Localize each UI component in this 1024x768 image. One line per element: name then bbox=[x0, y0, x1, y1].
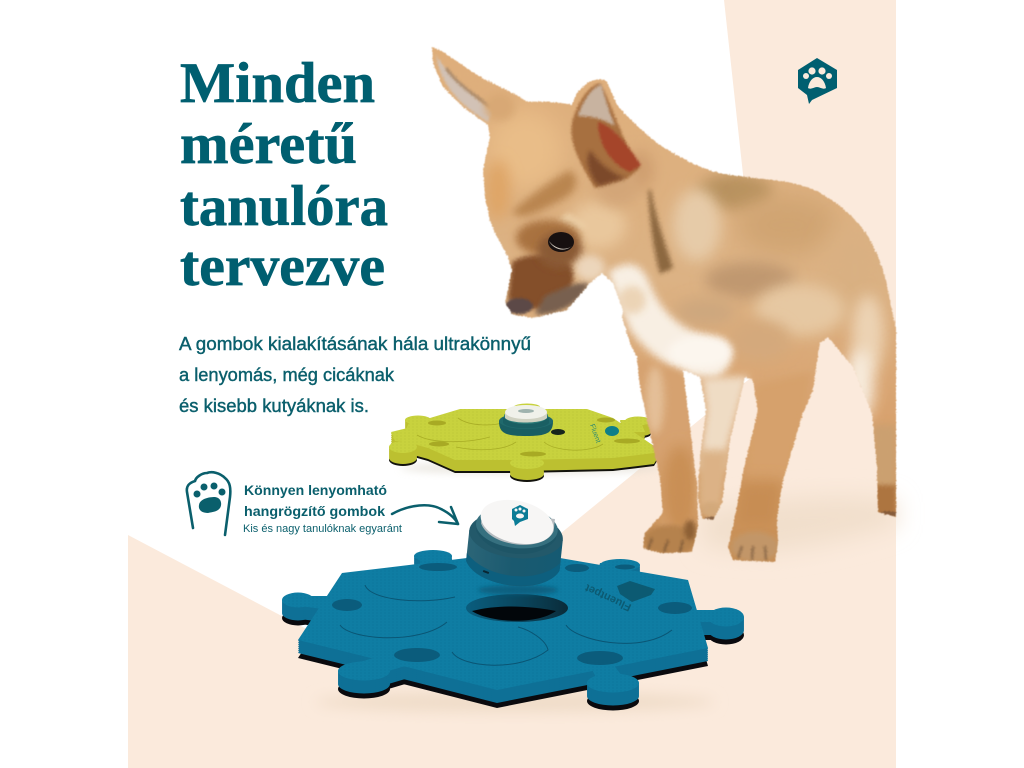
floor shadow under dog bbox=[700, 497, 896, 552]
muzzle bbox=[508, 255, 574, 309]
yellow board logo bbox=[588, 423, 619, 444]
title bbox=[180, 52, 388, 298]
dog fur shading bbox=[436, 55, 898, 562]
yellow board shadow bbox=[400, 462, 660, 474]
yellow board carved circles bbox=[417, 418, 603, 450]
body text: A gombok kialakításának hála ultrakönnyű bbox=[179, 334, 531, 354]
head tone bbox=[493, 115, 558, 184]
title: tervezve bbox=[180, 235, 385, 298]
small dark button bbox=[499, 405, 553, 436]
button port bbox=[483, 570, 489, 574]
back tones bbox=[697, 174, 773, 210]
button shadow bbox=[478, 585, 558, 595]
neck crease bbox=[648, 190, 673, 274]
body text: a lenyomás, még cicáknak bbox=[179, 365, 395, 385]
legs tone bbox=[638, 362, 698, 528]
yellow board side bbox=[389, 404, 657, 480]
callout text: hangrögzítő gombok bbox=[244, 504, 386, 519]
title: tanulóra bbox=[180, 175, 388, 238]
callout text: Könnyen lenyomható bbox=[244, 483, 387, 498]
right ear bbox=[571, 83, 640, 188]
board logo: Fluentpet bbox=[583, 581, 633, 613]
board carved circles bbox=[340, 585, 672, 665]
eye patch bbox=[516, 220, 580, 256]
button white top bbox=[476, 493, 558, 551]
background: white panel bbox=[128, 0, 764, 673]
brow band bbox=[512, 170, 576, 216]
dog body silhouette bbox=[432, 47, 896, 562]
yellow board hole bbox=[551, 429, 565, 435]
background: beige panel bbox=[128, 0, 896, 768]
paws bbox=[643, 525, 697, 555]
board top face bbox=[282, 550, 744, 692]
dog eye bbox=[548, 232, 574, 252]
callout text: Kis és nagy tanulóknak egyaránt bbox=[243, 523, 402, 535]
yellow board notches bbox=[428, 418, 640, 456]
body text bbox=[179, 334, 531, 416]
yellow board logo: Fluent bbox=[588, 423, 601, 444]
button shell bbox=[464, 501, 566, 590]
board logo bbox=[583, 581, 655, 613]
title: Minden bbox=[180, 52, 375, 115]
board side walls bbox=[282, 551, 744, 706]
button paw logo bbox=[512, 505, 528, 526]
icon: paw outline bbox=[187, 472, 230, 535]
yellow board base bbox=[389, 416, 657, 482]
arrow bbox=[392, 505, 458, 524]
nose bbox=[505, 298, 533, 314]
board notches bbox=[332, 563, 692, 665]
yellow-green activity board bbox=[389, 404, 660, 482]
callout text bbox=[243, 483, 402, 535]
blue activity board bbox=[282, 493, 744, 712]
center hole bbox=[466, 594, 568, 622]
body text: és kisebb kutyáknak is. bbox=[179, 396, 369, 416]
recordable button bbox=[464, 493, 566, 595]
icon: brand logo bbox=[798, 58, 837, 104]
yellow board top face bbox=[389, 404, 657, 469]
chest white bbox=[608, 264, 731, 378]
board black underside bbox=[282, 568, 744, 710]
title: méretű bbox=[180, 113, 357, 176]
left ear inner bbox=[436, 55, 492, 122]
dog photo illustration bbox=[432, 47, 898, 562]
infographic canvas bbox=[128, 0, 906, 768]
blue board shadow bbox=[315, 692, 715, 712]
